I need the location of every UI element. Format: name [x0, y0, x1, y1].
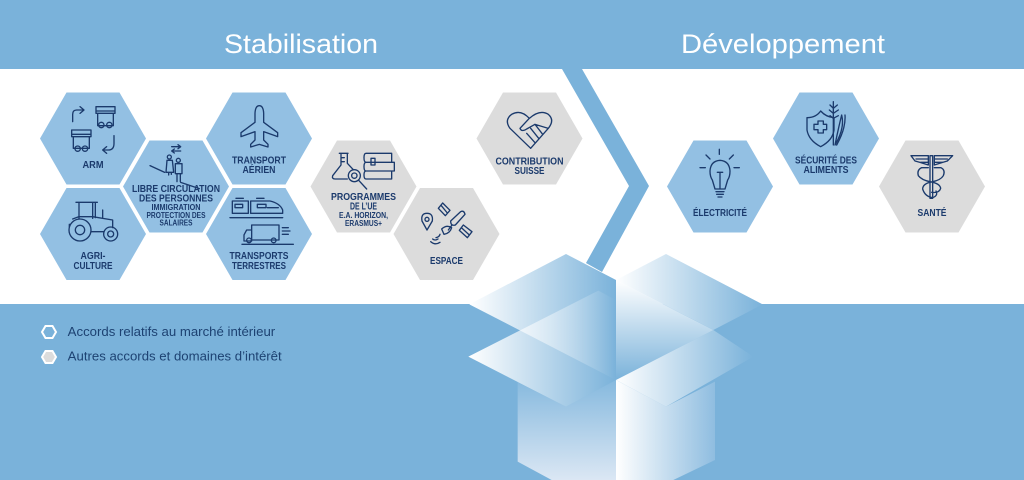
icon: plane — [241, 106, 278, 147]
label: SANTÉ — [918, 206, 947, 219]
bottom band — [0, 304, 1024, 480]
label: SÉCURITÉ DES — [795, 154, 857, 167]
panel: Agriculture — [40, 188, 146, 280]
heading: Stabilisation: Stabilisation — [224, 29, 378, 59]
box: inner back — [616, 280, 713, 380]
label: PROGRAMMES — [331, 192, 396, 203]
box: right face — [616, 380, 715, 480]
legend text: internal market: Accords relatifs au marché intérieur — [68, 324, 276, 339]
panel: Santé — [879, 140, 985, 232]
box: left face — [518, 380, 616, 480]
label: LIBRE CIRCULATION — [132, 184, 220, 195]
hexagon — [773, 92, 879, 184]
icon: train and truck — [230, 198, 293, 244]
hexagon — [667, 140, 773, 232]
panel: Sécurité des aliments: ALIMENTS — [804, 165, 849, 176]
icon: carts and arrows — [72, 107, 115, 153]
arrow: chevron separator — [562, 69, 649, 272]
panel: Transport aérien: AÉRIEN — [242, 163, 276, 176]
label: TRANSPORT — [232, 156, 287, 166]
icon: flask and books — [332, 153, 394, 189]
panel: ARM — [40, 92, 146, 184]
hexagon — [310, 140, 416, 232]
panel: Libre circulation: DES PERSONNES — [139, 194, 213, 205]
icon: satellite and pin — [422, 203, 472, 244]
legend marker: internal market — [42, 326, 56, 338]
icon: tractor — [69, 202, 118, 241]
label: ARM — [82, 160, 104, 171]
icon: people and arrows — [150, 145, 199, 189]
icon: shield and wheat — [807, 102, 845, 147]
top band — [0, 0, 1024, 69]
icon: heart handshake — [507, 112, 552, 148]
hexagon — [476, 92, 582, 184]
legend — [42, 324, 282, 363]
label: CONTRIBUTION — [496, 156, 564, 167]
hexagon — [879, 140, 985, 232]
hexagon — [206, 188, 312, 280]
panel: Contribution suisse: SUISSE — [514, 166, 545, 177]
panel: Espace — [394, 188, 500, 280]
hexagon — [394, 188, 500, 280]
hexagon — [40, 188, 146, 280]
panel: Programmes de l'UE: ERASMUS+ — [345, 219, 382, 228]
panel: Transports terrestres: TERRESTRES — [232, 261, 286, 272]
box: front left flap — [468, 291, 616, 407]
panel: Programmes de l'UE: DE L’UE — [350, 202, 377, 212]
panel: Libre circulation: SALAIRES — [160, 219, 193, 228]
label: ESPACE — [430, 256, 463, 267]
panel: Libre circulation: IMMIGRATION — [152, 203, 201, 212]
panel: Programmes de l'UE: E.A. HORIZON, — [339, 211, 388, 220]
panel: Programmes de l'UE — [310, 140, 416, 232]
icon: light bulb — [700, 149, 739, 197]
panel: Libre circulation: PROTECTION DES — [146, 211, 206, 220]
box: back left flap — [469, 254, 616, 380]
hexagon — [40, 92, 146, 184]
panel: Libre circulation — [123, 140, 229, 232]
panel: Transports terrestres — [206, 188, 312, 280]
icon: caduceus — [911, 156, 953, 198]
legend text: other agreements: Autres accords et domaines d’intérêt — [68, 348, 282, 363]
label: ÉLECTRICITÉ — [693, 206, 747, 219]
legend marker: other agreements — [42, 351, 56, 363]
label: TRANSPORTS — [230, 251, 289, 262]
panel: Agriculture: CULTURE — [74, 261, 113, 272]
box: front right flap — [616, 330, 753, 407]
panel: Sécurité des aliments — [773, 92, 879, 184]
icon: open box — [468, 254, 763, 480]
box: back right flap — [616, 254, 763, 330]
label: AGRI- — [80, 251, 106, 262]
hexagon — [206, 92, 312, 184]
panel: Contribution suisse — [476, 92, 582, 184]
panel: Électricité — [667, 140, 773, 232]
hexagon — [123, 140, 229, 232]
heading: Développement: Développement — [681, 29, 886, 59]
panel: Transport aérien — [206, 92, 312, 184]
